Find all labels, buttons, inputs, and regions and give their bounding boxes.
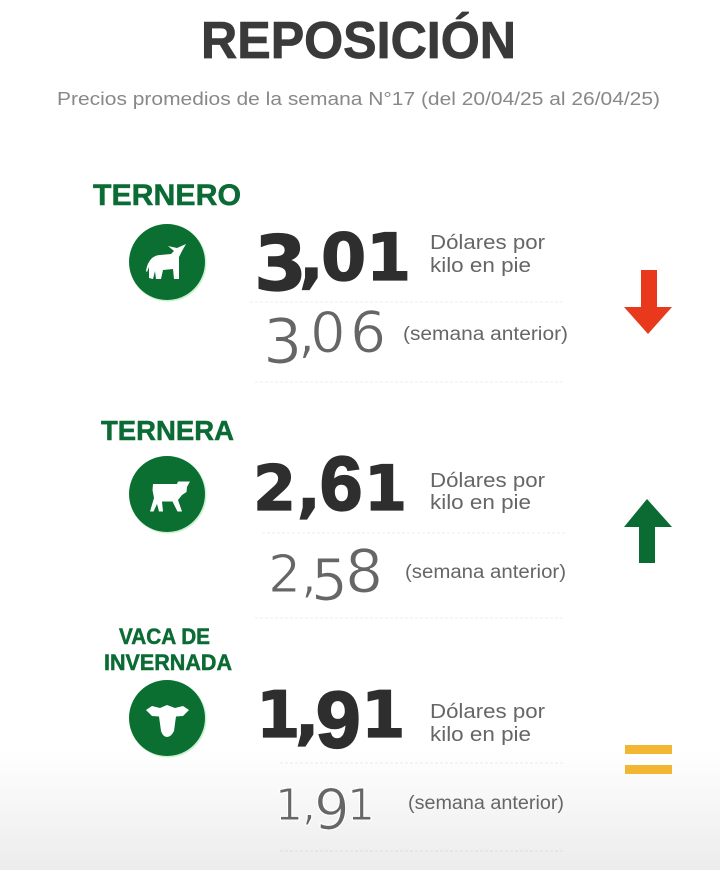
arrow: up (624, 499, 672, 563)
panel: ternera (101, 415, 672, 618)
current price: 1 (256, 679, 301, 753)
unit: kilo en pie (430, 255, 531, 277)
unit: Dólares por (430, 232, 545, 254)
unit: Dólares por (430, 701, 545, 723)
current price: 0 (321, 221, 366, 296)
previous price: 5 (311, 546, 348, 614)
icon: calf in green circle (129, 224, 206, 302)
current price: , (295, 679, 319, 753)
subtitle: Precios promedios de la semana N°17 (del 20/04/25 al 26/04/25) (57, 89, 660, 109)
current price: 1 (364, 452, 407, 525)
previous week label: (semana anterior) (408, 793, 564, 814)
previous price: , (302, 780, 316, 831)
previous week label: (semana anterior) (403, 324, 568, 345)
heading: vaca de invernada: INVERNADA (104, 650, 232, 675)
panel: vaca de invernada (104, 624, 672, 851)
current price: , (299, 221, 324, 296)
heading: ternero: TERNERO (93, 179, 241, 212)
icon: equal sign (625, 745, 672, 774)
previous price: , (298, 301, 315, 365)
previous week label: (semana anterior) (405, 562, 566, 583)
previous price: 1 (347, 780, 375, 831)
unit (430, 232, 545, 277)
icon: heifer in green circle (129, 456, 206, 534)
current price: 3 (254, 219, 307, 308)
previous price: 8 (345, 537, 383, 607)
title: REPOSICIÓN (201, 12, 516, 70)
unit (430, 470, 545, 514)
previous price: 3 (263, 305, 302, 378)
heading: ternera: TERNERA (101, 415, 234, 446)
heading: vaca de invernada (104, 624, 232, 675)
current price: 1 (366, 221, 411, 296)
current price: 2 (253, 452, 296, 525)
previous price: , (301, 546, 317, 604)
icon: cow head in green circle (129, 680, 206, 758)
current price: 6 (320, 442, 362, 527)
panel: ternero (93, 179, 672, 382)
previous price: 0 (310, 301, 346, 366)
unit: Dólares por (430, 470, 545, 492)
previous price: 2 (268, 545, 301, 605)
arrow: down (624, 270, 672, 334)
previous price: 1 (275, 780, 303, 831)
unit: kilo en pie (430, 492, 531, 514)
unit: kilo en pie (430, 724, 531, 746)
heading: vaca de invernada: VACA DE (119, 624, 210, 649)
unit (430, 701, 545, 746)
current price: , (297, 452, 321, 525)
previous price: 9 (314, 778, 350, 843)
current price: 9 (316, 675, 360, 764)
current price: 1 (361, 679, 406, 753)
previous price: 6 (350, 300, 386, 366)
